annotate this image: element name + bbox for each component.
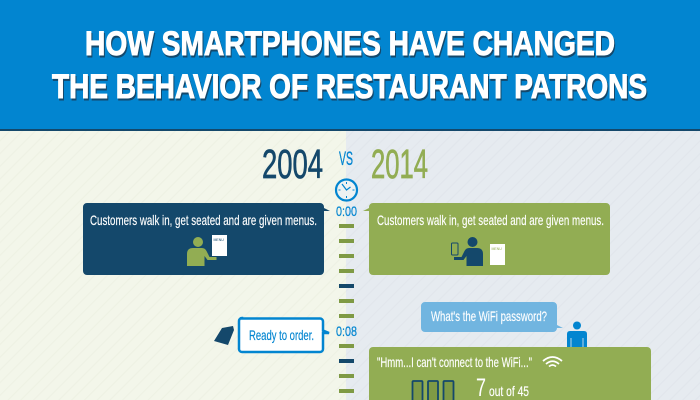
callout: ready to order: Ready to order. [249, 327, 314, 343]
icon: blue person [567, 322, 587, 350]
vs label: VS [339, 149, 353, 170]
year heading: 2004: 2004 [262, 141, 323, 187]
text: 2014 customers walk in: Customers walk in, get seated and are given menus. [377, 212, 604, 228]
header banner [0, 0, 700, 131]
icon: clock [336, 180, 357, 200]
panel: 2004 customers seated [83, 203, 330, 275]
icon: person with phone and menu [452, 237, 505, 266]
stat: 7 out of 45: out of 45 [489, 383, 529, 399]
background: 2004 side [0, 130, 346, 400]
callout: ready to order [239, 318, 329, 352]
stat: 7 out of 45 [476, 374, 529, 400]
icon: person with menu: MENU [214, 238, 224, 242]
year heading: 2014: 2014 [371, 141, 428, 187]
text: can't connect: "Hmm...I can't connect to the WiFi..." [377, 354, 532, 370]
icon: three phones [412, 381, 454, 400]
time label 0:08: 0:08 [336, 323, 357, 339]
icon: wifi [543, 357, 562, 366]
icon: person with menu [187, 235, 227, 266]
icon: person with phone and menu: MENU [492, 247, 502, 251]
background: 2014 side [346, 130, 700, 400]
time label 0:00: 0:00 [336, 203, 357, 219]
callout: wifi password: What's the WiFi password? [431, 308, 547, 324]
title [52, 25, 647, 106]
panel: 2014 customers seated [363, 203, 610, 275]
panel: wifi trouble [369, 347, 651, 400]
text: 2004 customers walk in: Customers walk in, get seated and are given menus. [90, 212, 317, 228]
callout: wifi password [421, 302, 563, 332]
timeline ticks [339, 224, 354, 393]
icon: closed menu [214, 326, 234, 345]
